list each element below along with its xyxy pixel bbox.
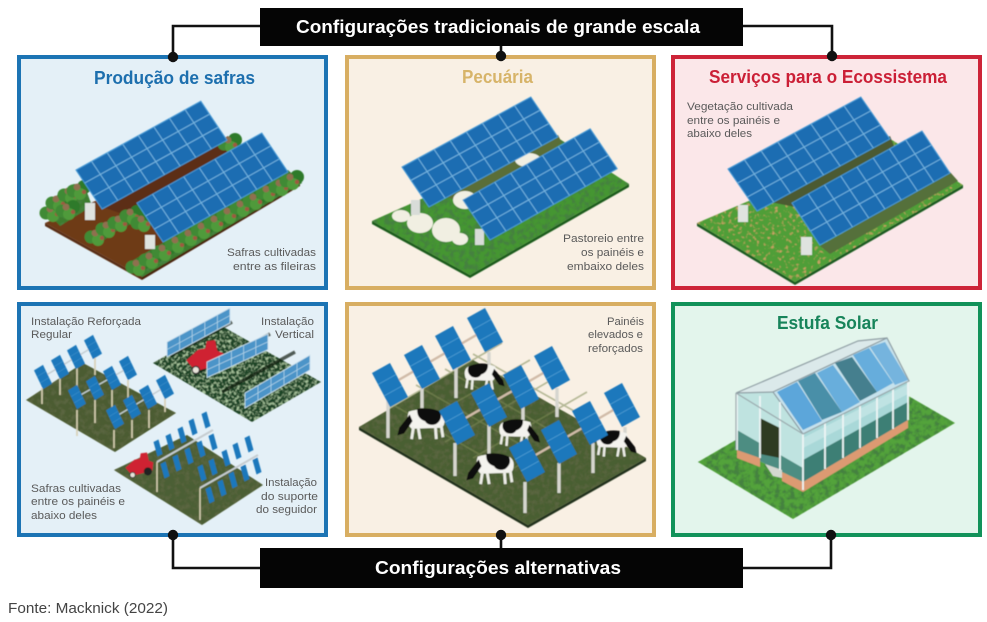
- captions: alternative crops: abaixo deles: [31, 510, 98, 522]
- panel: livestock: [347, 57, 654, 288]
- frame: ecosystem services: [673, 57, 980, 288]
- panel: elevated panels with cows: [347, 304, 654, 535]
- icon: cow front: [466, 453, 514, 484]
- caption: elevated panels: [588, 316, 645, 355]
- illustration: greenhouse: [698, 338, 955, 519]
- captions: alternative crops: Vertical: [275, 329, 314, 341]
- frame: elevated panels: [347, 304, 654, 535]
- frame: crop production: [19, 57, 326, 288]
- icon: cow centre: [499, 419, 540, 446]
- captions: alternative crops: entre os painéis e: [31, 496, 125, 508]
- top title bar: [260, 8, 743, 46]
- caption: elevated panels: reforçados: [588, 343, 644, 355]
- caption: crops between rows: [227, 247, 317, 273]
- illustration: panels between crop rows: [40, 101, 304, 280]
- caption: elevated panels: elevados e: [588, 329, 643, 341]
- connector lines to top and bottom bars: [173, 26, 832, 568]
- illustration: vertical array with tractor: [153, 308, 321, 422]
- roof: [736, 338, 887, 393]
- panel: alternative crop installations: [19, 304, 326, 535]
- panel: crop production: [19, 57, 326, 288]
- caption: vegetation: abaixo deles: [687, 128, 753, 140]
- illustration: grazing sheep under panels: [372, 97, 629, 278]
- caption: vegetation: entre os painéis e: [687, 115, 780, 127]
- caption: crops between rows: entre as fileiras: [233, 261, 317, 273]
- caption: elevated panels: Painéis: [607, 316, 645, 328]
- frame: livestock: [347, 57, 654, 288]
- planter boxes: [782, 420, 908, 492]
- bottom title bar: Configurações alternativas: [375, 558, 621, 578]
- captions: alternative crops: Safras cultivadas: [31, 483, 122, 495]
- captions: alternative crops: do seguidor: [256, 504, 317, 516]
- captions: alternative crops: [31, 316, 318, 522]
- illustration: vegetation under panels: [697, 97, 963, 285]
- heading: crop production: Produção de safras: [94, 68, 255, 88]
- caption: grazing: embaixo deles: [567, 261, 645, 273]
- heading: livestock: Pecuária: [462, 67, 534, 87]
- icon: cow right: [597, 431, 637, 457]
- frame: solar greenhouse: [673, 304, 980, 535]
- source note: Fonte: Macknick (2022): [8, 600, 168, 617]
- captions: alternative crops: do suporte: [261, 491, 318, 503]
- icon: cow: [397, 408, 445, 439]
- long side wall: [803, 381, 909, 482]
- left gable wall: [736, 392, 803, 482]
- frame: alternative crops: [19, 304, 326, 535]
- captions: alternative crops: Instalação Reforçada: [31, 316, 142, 328]
- connector dots: [168, 51, 837, 540]
- caption: grazing: os painéis e: [581, 247, 644, 259]
- caption: vegetation: [687, 101, 794, 140]
- bottom title bar: [260, 548, 743, 588]
- panel: ecosystem services: [673, 57, 980, 288]
- icon: red tractor: [186, 340, 223, 374]
- caption: grazing: [563, 233, 645, 273]
- captions: alternative crops: Instalação: [265, 477, 317, 489]
- heading: ecosystem services: Serviços para o Ecossistema: [709, 67, 948, 87]
- captions: alternative crops: Instalação: [261, 316, 314, 328]
- caption: grazing: Pastoreio entre: [563, 233, 644, 245]
- icon: small red tractor: [125, 452, 153, 478]
- illustration: regular reinforced array: [26, 335, 176, 452]
- caption: crops between rows: Safras cultivadas: [227, 247, 317, 259]
- caption: vegetation: Vegetação cultivada: [687, 101, 794, 113]
- icon: cow behind: [465, 364, 505, 390]
- panel: solar greenhouse: [673, 304, 980, 535]
- captions: alternative crops: Regular: [31, 329, 72, 341]
- illustration: cows under raised panels: [359, 308, 646, 528]
- top title bar: Configurações tradicionais de grande escala: [296, 17, 701, 37]
- heading: solar greenhouse: Estufa Solar: [777, 313, 878, 333]
- illustration: tracker array with tractor: [114, 412, 263, 525]
